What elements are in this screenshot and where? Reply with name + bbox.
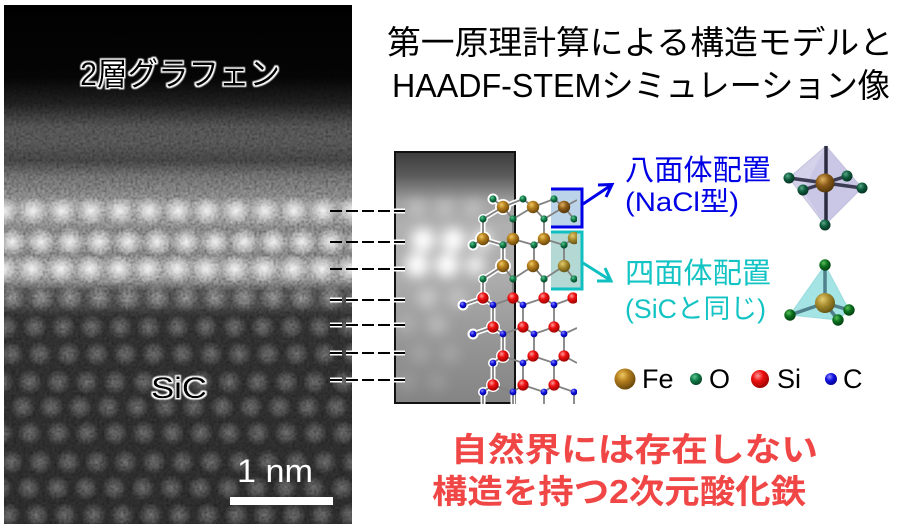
label: tetrahedral coordination bbox=[625, 257, 771, 324]
label: octahedral coordination: 八面体配置 bbox=[625, 154, 771, 187]
scale bar: 1 nm: 1 nm bbox=[237, 453, 313, 489]
conclusion text: 構造を持つ2次元酸化鉄 bbox=[432, 473, 806, 510]
legend: atom types: Si bbox=[777, 364, 801, 394]
icon: octahedron bbox=[784, 146, 868, 230]
label: tetrahedral coordination: (SiCと同じ) bbox=[625, 294, 766, 324]
atomic structure model bbox=[458, 194, 580, 404]
tetrahedral site box bbox=[551, 232, 582, 290]
legend: atom types bbox=[614, 364, 862, 394]
title: 第一原理計算による構造モデルと bbox=[387, 24, 893, 61]
title bbox=[387, 24, 893, 104]
dashed guide lines bbox=[330, 211, 405, 380]
label: octahedral coordination bbox=[625, 154, 771, 217]
legend: atom types: O bbox=[709, 364, 730, 394]
atoms: C bbox=[460, 302, 577, 395]
scale bar: 1 nm bbox=[230, 453, 333, 505]
panel: HAADF-STEM micrograph bbox=[4, 5, 352, 524]
label: SiC: SiC bbox=[151, 372, 207, 405]
atoms: Fe bbox=[477, 201, 580, 272]
SiC atomic rows bbox=[4, 286, 352, 524]
bright Fe-oxide atomic rows bbox=[4, 198, 352, 282]
legend: atom types: Fe bbox=[642, 364, 674, 394]
conclusion text: 自然界には存在しない bbox=[451, 431, 818, 468]
icon: tetrahedron bbox=[784, 259, 855, 326]
atoms: O bbox=[469, 195, 578, 283]
arrow: to tetrahedral site bbox=[583, 263, 611, 281]
arrow: to octahedral site bbox=[583, 184, 612, 204]
atoms: Si bbox=[477, 292, 579, 391]
conclusion text bbox=[432, 431, 818, 510]
title: HAADF-STEMシミュレーション像 bbox=[392, 67, 890, 104]
label: octahedral coordination: (NaCl型) bbox=[625, 187, 739, 217]
label: bilayer graphene: 2層グラフェン bbox=[80, 56, 280, 92]
label: tetrahedral coordination: 四面体配置 bbox=[625, 257, 771, 290]
legend: atom types: C bbox=[843, 364, 862, 394]
octahedral site box bbox=[551, 189, 582, 227]
panel: simulated HAADF-STEM image bbox=[395, 152, 515, 403]
